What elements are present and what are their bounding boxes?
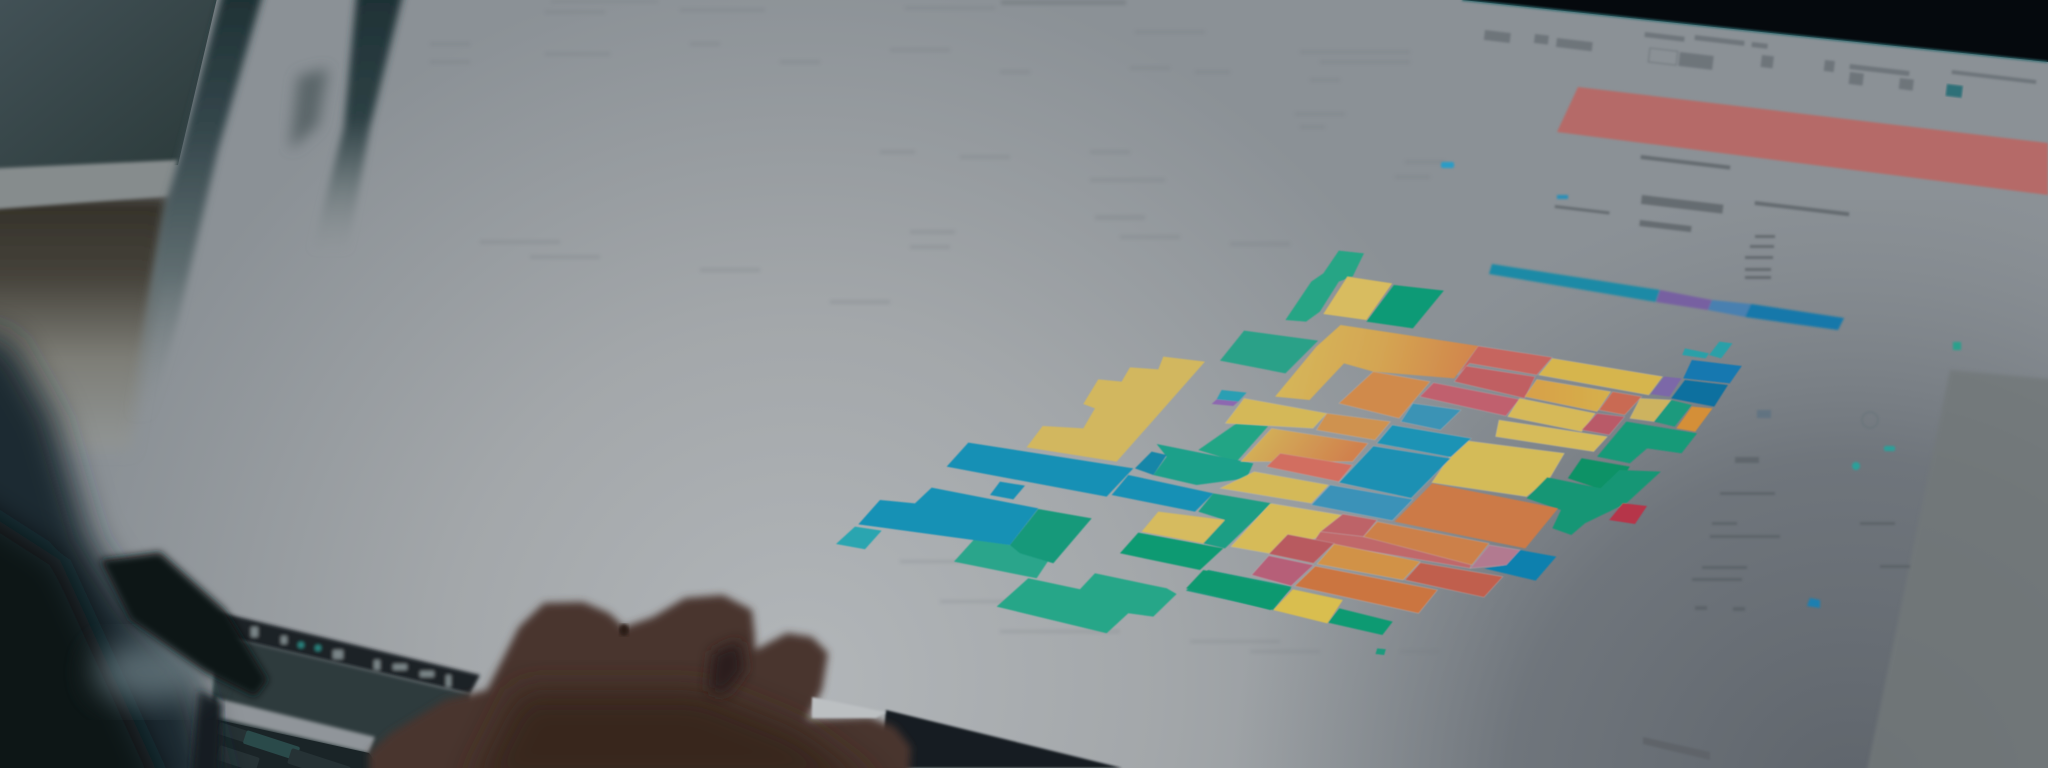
background wall and shelf <box>0 0 226 450</box>
lighter right side panel <box>1865 370 2048 768</box>
white laptop edge <box>216 698 375 753</box>
teal ribbon button <box>1946 84 1963 98</box>
left yellow staircase <box>1027 357 1205 462</box>
right blue column <box>1650 342 1742 432</box>
bottom page label bar <box>1643 737 1710 760</box>
monitor lower bezel <box>205 635 470 768</box>
small teal and blue right markers <box>1807 446 1895 608</box>
long blue cell <box>947 443 1133 497</box>
green hook cell <box>1198 493 1272 548</box>
keyboard <box>205 717 380 768</box>
treemap left half <box>836 357 1292 633</box>
small data labels below banner <box>1555 155 1849 279</box>
treemap lower right half <box>1186 483 1558 655</box>
right green cluster <box>1527 422 1697 535</box>
teal and purple marker <box>1212 390 1247 406</box>
large orange cell <box>1394 483 1558 548</box>
red banner <box>1557 87 2048 195</box>
bottom green cluster <box>997 573 1177 633</box>
yellow to orange band <box>1275 325 1478 400</box>
page darkening toward lower right <box>1100 200 2048 768</box>
legend swatch <box>1376 648 1386 655</box>
faint document text on page <box>430 0 1445 653</box>
bottom green and yellow row <box>1186 570 1393 635</box>
teal band <box>1153 444 1253 485</box>
small blue cell <box>990 482 1025 499</box>
top right black background <box>1462 0 2048 62</box>
paper corner beside hand <box>812 697 886 718</box>
top colour strip <box>1489 264 1844 330</box>
lower warm cells <box>1231 503 1520 613</box>
ribbon toolbar marks <box>1484 30 2036 91</box>
small blue page markers <box>1441 162 1961 350</box>
screen edge and dark gap right of hand <box>880 710 1122 768</box>
person shoulder and sleeve <box>0 320 268 768</box>
centre blue cluster <box>1311 403 1471 521</box>
warm cells <box>1220 346 1671 503</box>
treemap chart <box>836 251 1742 655</box>
large blue cell <box>858 488 1038 545</box>
blue cell <box>1484 550 1556 581</box>
blue wide cell <box>1112 475 1213 512</box>
bottom taskbar <box>218 612 480 694</box>
dark fold strip at top of page <box>312 0 404 250</box>
teal block <box>1220 331 1318 373</box>
small yellow cell <box>1142 512 1225 543</box>
treemap upper right half <box>1220 251 1742 535</box>
hand <box>369 595 911 768</box>
small teal cell <box>836 527 882 549</box>
blurred thumbnail on side strip <box>290 68 328 150</box>
left monitor bezel <box>128 0 264 420</box>
green mid cell <box>1198 423 1268 462</box>
faint right side labels and icons <box>1692 410 1910 611</box>
blue chip <box>1135 452 1167 475</box>
top green and yellow cells <box>1285 251 1444 328</box>
lower dark green cell <box>1186 570 1292 610</box>
red cell <box>1609 503 1647 524</box>
light green cell <box>954 538 1053 578</box>
dark green wide cell <box>1120 533 1223 570</box>
dark green cell <box>1010 509 1092 563</box>
